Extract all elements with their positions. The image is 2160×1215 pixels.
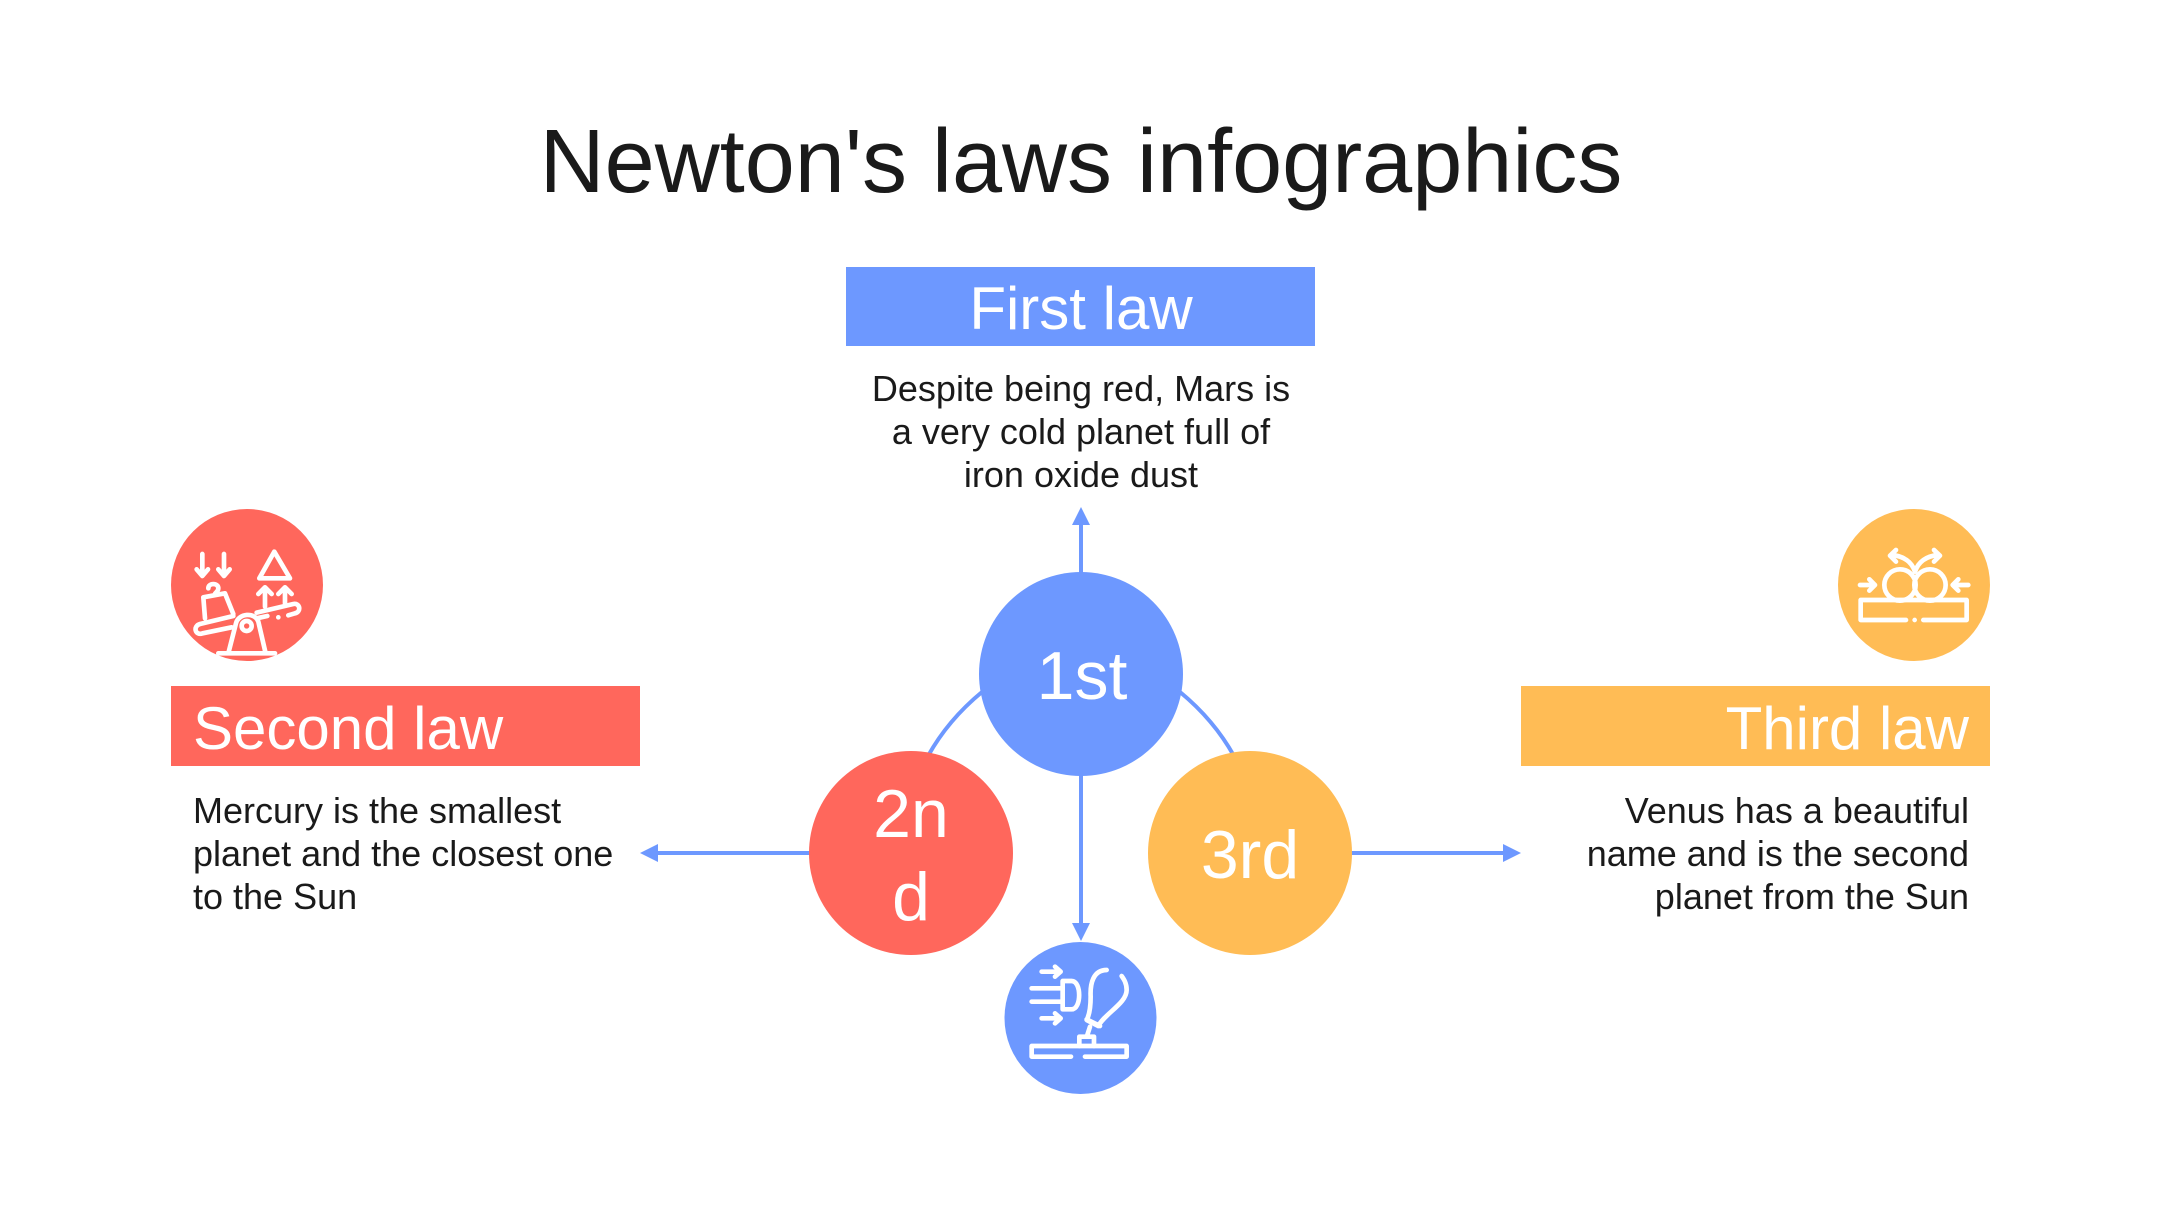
panel: first law [846, 267, 1315, 495]
circle: 1st: 1st [1037, 638, 1127, 714]
heading: second law [171, 686, 640, 766]
text: first law description: a very cold planet full of [892, 411, 1271, 452]
circle: 3rd: 3rd [1201, 817, 1299, 893]
heading: first law [846, 267, 1315, 346]
panel: third law [1521, 686, 1990, 917]
connector: 1st to 3rd [1180, 692, 1234, 756]
circle: 2nd: 2n [873, 776, 949, 852]
circle: 3rd [1148, 751, 1352, 955]
circle: 1st [979, 572, 1183, 776]
arrow: up to first law [1072, 507, 1090, 575]
connector: 1st to 2nd [928, 692, 982, 756]
text: second law description: planet and the closest one [193, 833, 613, 874]
text: first law description: iron oxide dust [964, 454, 1198, 495]
circle: 2nd: d [892, 859, 930, 935]
text: third law description: Venus has a beautiful [1625, 790, 1969, 831]
icon: colliding spheres [1838, 509, 1990, 661]
title: Newton's laws infographics [540, 112, 1622, 212]
icon: bulb and ball [1004, 942, 1156, 1094]
heading: third law: Third law [1726, 695, 1970, 762]
heading: first law: First law [969, 275, 1193, 342]
text: first law description: Despite being red, Mars is [872, 368, 1290, 409]
arrow: down to first law icon [1072, 770, 1090, 941]
heading: second law: Second law [193, 695, 504, 762]
heading: third law [1521, 686, 1990, 766]
panel: second law [171, 686, 640, 917]
arrow: left to second law [640, 844, 812, 862]
arrow: right to third law [1350, 844, 1521, 862]
text: third law description: planet from the Sun [1655, 876, 1969, 917]
text: second law description: Mercury is the smallest [193, 790, 561, 831]
icon: seesaw [171, 509, 323, 661]
text: second law description: to the Sun [193, 876, 357, 917]
text: third law description: name and is the second [1587, 833, 1969, 874]
circle: 2nd [809, 751, 1013, 955]
